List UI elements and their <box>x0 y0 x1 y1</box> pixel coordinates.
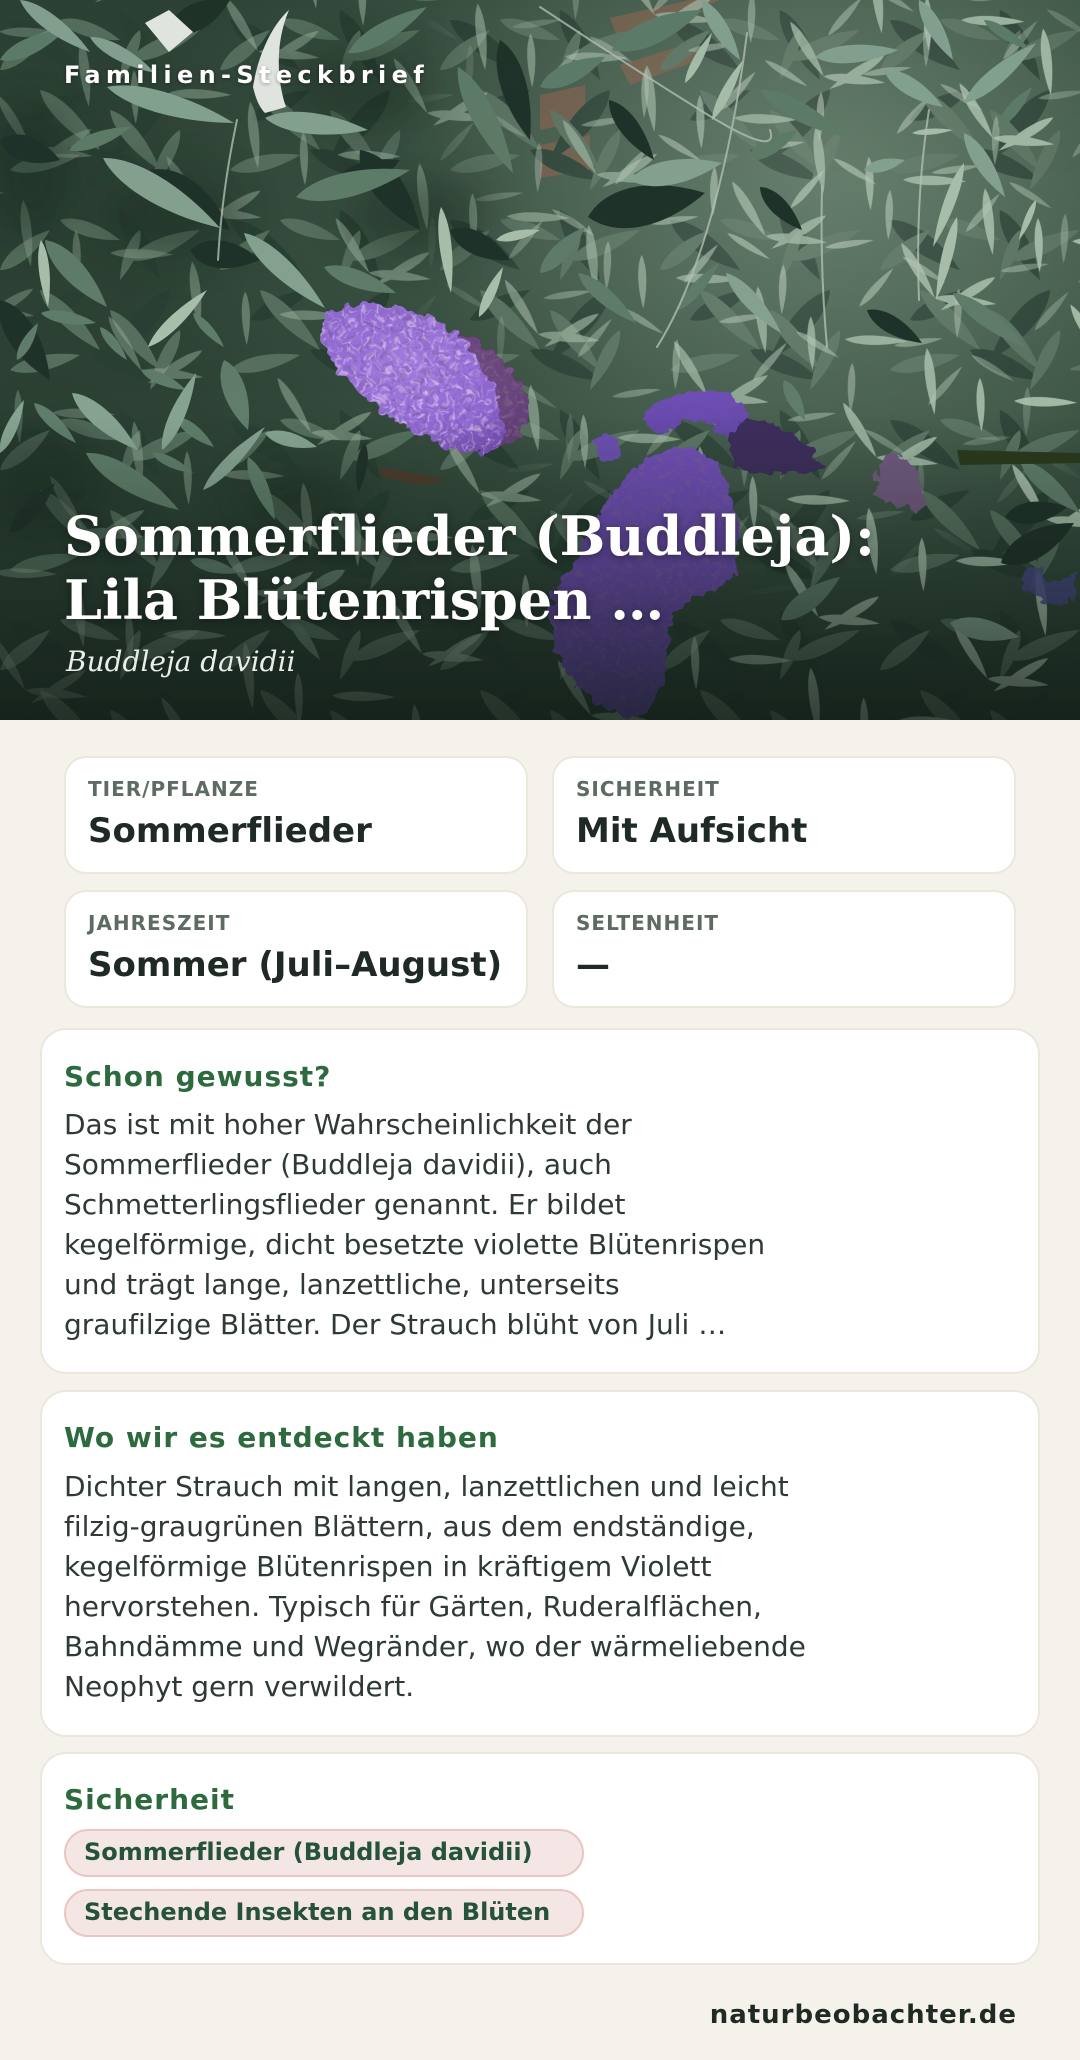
text block: fun fact <box>64 1108 765 1341</box>
bottom fade overlay <box>0 0 1080 720</box>
scientific name: Buddleja davidii <box>66 645 295 678</box>
text block: fun fact: Das ist mit hoher Wahrscheinlichkeit der <box>64 1108 632 1141</box>
soft shadow patches on the left <box>0 50 490 540</box>
text block: fun fact: und trägt lange, lanzettliche, unterseits <box>64 1268 620 1301</box>
fact card: Sicherheit: SICHERHEIT <box>576 777 720 801</box>
pale foliage pattern <box>0 0 1080 720</box>
pill: Sommerflieder <box>64 1829 584 1877</box>
panel: Wo wir es entdeckt haben <box>40 1390 1040 1737</box>
fact card: Jahreszeit <box>64 890 528 1008</box>
heading: Wo wir es entdeckt haben: Wo wir es entdeckt haben <box>64 1421 499 1454</box>
text block: fun fact: Sommerflieder (Buddleja davidii), auch <box>64 1148 612 1181</box>
fact card: Tier/Pflanze: TIER/PFLANZE <box>88 777 259 801</box>
title <box>64 504 875 634</box>
pill: Sommerflieder: Sommerflieder (Buddleja davidii) <box>84 1838 533 1866</box>
text block: habitat: Neophyt gern verwildert. <box>64 1670 414 1703</box>
soft light over upper right <box>0 0 1080 720</box>
fact card: Sicherheit <box>552 756 1016 874</box>
kicker text: Familien-Steckbrief <box>64 61 429 89</box>
pale stems <box>218 7 929 347</box>
panel: Sicherheit <box>40 1752 1040 1965</box>
pill: Stechende Insekten: Stechende Insekten an den Blüten <box>84 1898 550 1926</box>
title: Lila Blütenrispen … <box>64 568 664 632</box>
light silver-green leaves <box>0 0 1041 648</box>
fine pale foliage, upper right <box>423 0 1080 576</box>
text block: habitat: filzig-graugrünen Blättern, aus dem endständige, <box>64 1510 755 1543</box>
fact card: Jahreszeit: Sommer (Juli–August) <box>88 945 502 985</box>
dark green stem and brown twig <box>379 450 1080 485</box>
text block: habitat: Bahndämme und Wegränder, wo der wärmeliebende <box>64 1630 806 1663</box>
heading: Schon gewusst: Schon gewusst? <box>64 1060 331 1093</box>
footer brand: naturbeobachter.de <box>710 2000 1017 2030</box>
text block: habitat <box>64 1470 806 1703</box>
thin pale leaves <box>36 31 1039 352</box>
flower: lower dark violet panicle <box>550 391 1075 716</box>
icon: white petals at top left <box>145 10 289 113</box>
text block: habitat: Dichter Strauch mit langen, lanzettlichen und leicht <box>64 1470 789 1503</box>
fact card: Jahreszeit: JAHRESZEIT <box>88 911 230 935</box>
text block: habitat: hervorstehen. Typisch für Gärten, Ruderalflächen, <box>64 1590 762 1623</box>
text block: fun fact: graufilzige Blätter. Der Strauch blüht von Juli … <box>64 1308 726 1341</box>
panel: Schon gewusst <box>40 1028 1040 1374</box>
background foliage pattern <box>0 0 1080 720</box>
heading: Sicherheit: Sicherheit <box>64 1783 235 1816</box>
title: Sommerflieder (Buddleja): <box>64 504 875 568</box>
fact card: Tier/Pflanze: Sommerflieder <box>88 811 372 851</box>
text block: habitat: kegelförmige Blütenrispen in kräftigem Violett <box>64 1550 711 1583</box>
text block: fun fact: Schmetterlingsflieder genannt. Er bildet <box>64 1188 625 1221</box>
fact card: Seltenheit: — <box>576 945 610 985</box>
mid-green leaves <box>0 0 1080 663</box>
photo: buddleja shrub illustration <box>0 0 1080 720</box>
fact card: Seltenheit: SELTENHEIT <box>576 911 719 935</box>
fact card: Seltenheit <box>552 890 1016 1008</box>
hero photo panel <box>0 0 1080 720</box>
brown fence slats behind the foliage <box>540 0 720 178</box>
dark shadow leaves <box>0 0 1080 575</box>
text block: fun fact: kegelförmige, dicht besetzte violette Blütenrispen <box>64 1228 765 1261</box>
fact card: Sicherheit: Mit Aufsicht <box>576 811 807 851</box>
flower: upper light violet panicle <box>322 304 530 453</box>
pill: Stechende Insekten <box>64 1889 584 1937</box>
fact card: Tier/Pflanze <box>64 756 528 874</box>
